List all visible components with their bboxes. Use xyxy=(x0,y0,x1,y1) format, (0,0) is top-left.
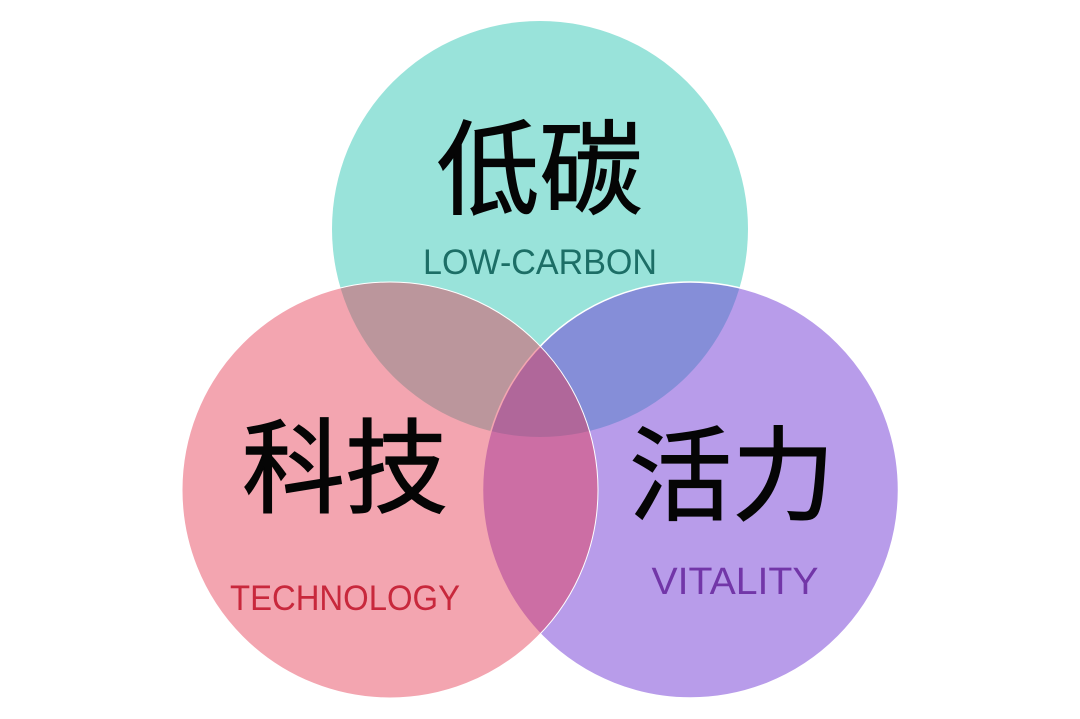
heading: 科技: 科技 xyxy=(242,412,448,526)
circle: low-carbon xyxy=(332,21,748,437)
heading: 活力: 活力 xyxy=(629,419,835,534)
label: VITALITY: VITALITY xyxy=(652,561,818,603)
circle: technology xyxy=(182,282,598,698)
circle: vitality xyxy=(482,282,898,698)
label: TECHNOLOGY: TECHNOLOGY xyxy=(230,579,460,618)
heading: 低碳: 低碳 xyxy=(436,113,642,228)
label: LOW-CARBON: LOW-CARBON xyxy=(423,243,657,282)
